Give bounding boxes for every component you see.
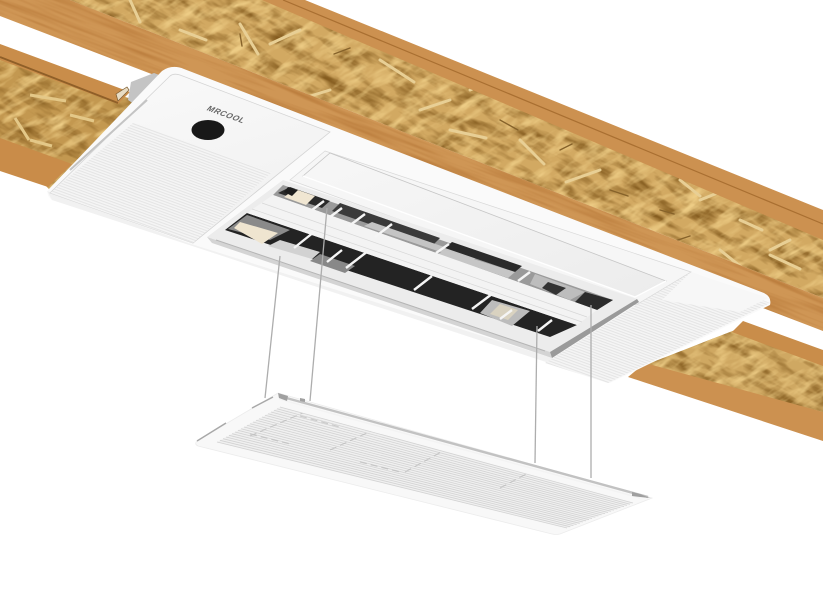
suspension wires <box>265 208 591 478</box>
round sensor <box>192 120 224 140</box>
mounting bracket <box>116 73 162 104</box>
joist: upper I-beam <box>0 0 823 331</box>
upper slot <box>273 185 613 310</box>
lower slot <box>225 213 577 337</box>
logo: MRCOOL <box>205 104 248 125</box>
lower joist flange upper left <box>0 44 130 104</box>
slot crossbars <box>294 201 552 331</box>
lower joist web left (OSB) <box>0 58 135 190</box>
ribbed texture <box>50 123 272 243</box>
grille left edge <box>197 397 273 441</box>
side groove <box>70 100 147 170</box>
grille rail <box>279 396 648 497</box>
top air vent flap <box>290 151 691 305</box>
grille corner clips <box>278 393 650 498</box>
lower joist flange upper right <box>732 321 823 366</box>
upper joist bottom flange <box>0 0 823 331</box>
lower joist flange bottom left <box>0 138 72 187</box>
lowered return-air grille <box>196 393 652 534</box>
upper joist top flange <box>262 0 823 240</box>
right end panel <box>545 272 770 383</box>
joist: lower left I-beam section <box>0 44 135 190</box>
upper joist web (OSB) <box>70 0 823 298</box>
opening frame <box>207 180 637 352</box>
cassette indoor unit <box>47 67 770 383</box>
lower joist flange bottom right <box>628 363 823 441</box>
middle white strip <box>247 195 597 325</box>
left end panel <box>50 74 330 243</box>
grille chevron shading <box>250 413 526 488</box>
lower joist web right (OSB) <box>640 330 823 412</box>
unit body <box>48 67 770 383</box>
joist: lower right I-beam section <box>628 321 823 441</box>
grille slats <box>217 407 633 528</box>
service opening <box>207 180 639 358</box>
grille slat field <box>217 407 633 528</box>
grille panel <box>196 393 652 534</box>
unit underside shade <box>47 191 610 383</box>
